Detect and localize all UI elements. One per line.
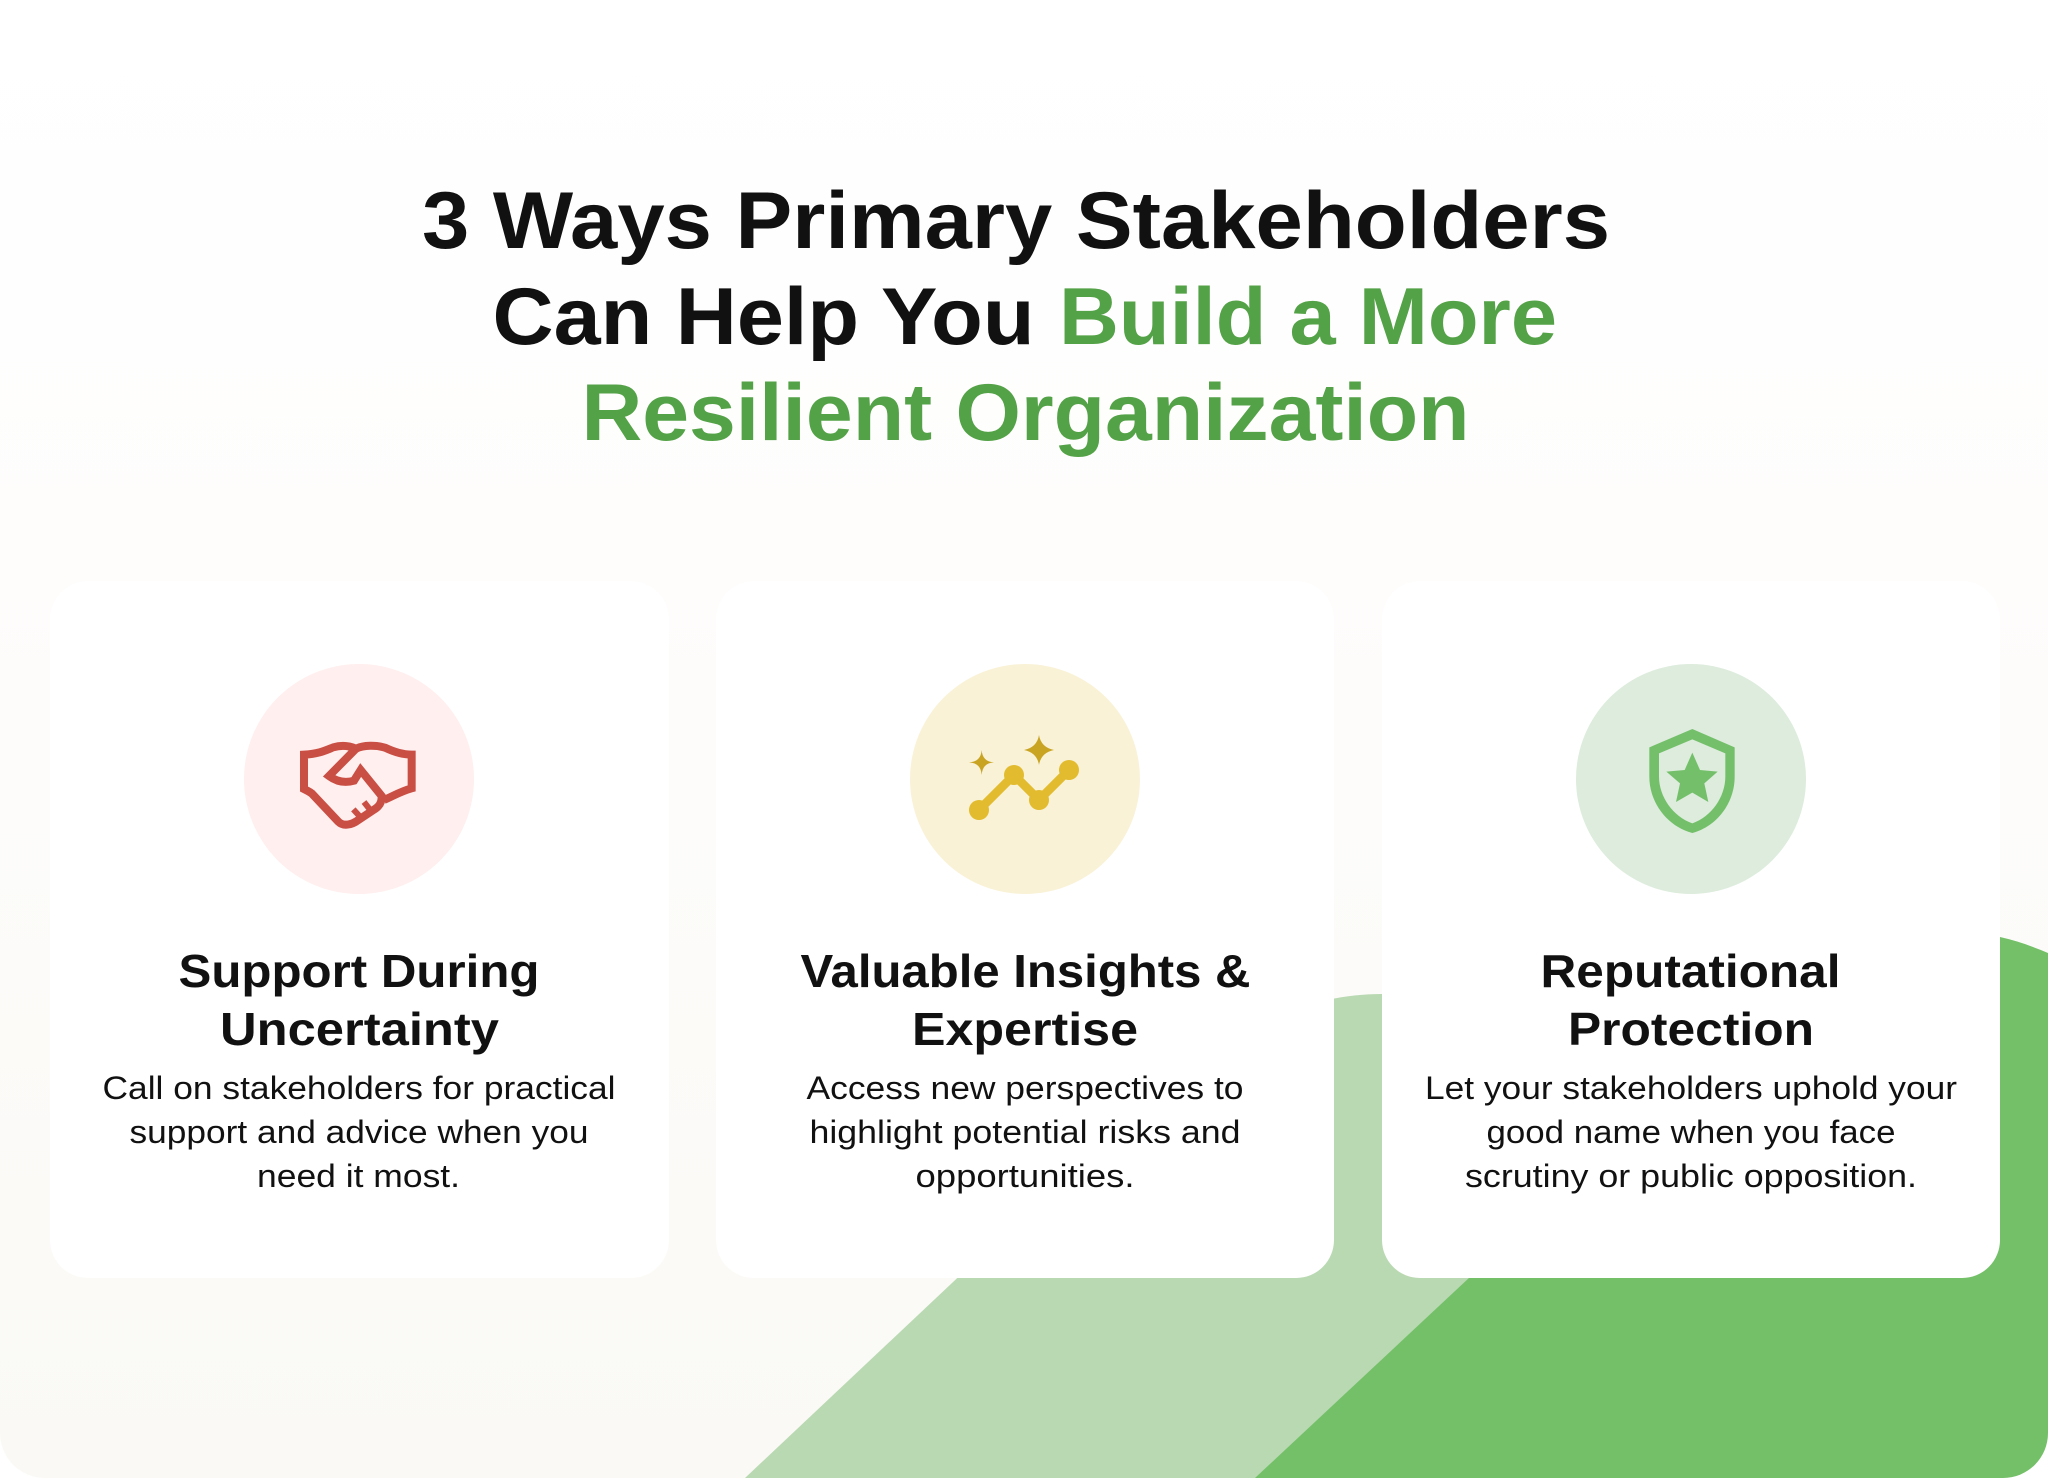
body text <box>102 1070 616 1194</box>
body text <box>806 1070 1244 1194</box>
body text: highlight potential risks and <box>810 1114 1240 1150</box>
heading <box>1540 945 1840 1055</box>
panel: support during uncertainty <box>50 581 669 1278</box>
icon: handshake <box>244 664 474 894</box>
title <box>422 176 1610 458</box>
heading: Protection <box>1568 1003 1814 1055</box>
heading: Expertise <box>912 1003 1138 1055</box>
heading <box>178 945 540 1055</box>
heading <box>800 945 1250 1055</box>
background panel <box>0 937 2048 1478</box>
panel: valuable insights and expertise <box>716 581 1334 1278</box>
body text: good name when you face <box>1486 1114 1896 1150</box>
title: Can Help You <box>492 272 1034 362</box>
heading: Uncertainty <box>220 1003 499 1055</box>
icon: chart with sparkles <box>910 664 1140 894</box>
body text <box>1425 1070 1957 1194</box>
body text: Access new perspectives to <box>806 1070 1244 1106</box>
body text: need it most. <box>257 1158 460 1194</box>
title: 3 Ways Primary Stakeholders <box>422 176 1610 266</box>
body text: Let your stakeholders uphold your <box>1425 1070 1957 1106</box>
panel: reputational protection <box>1382 581 2000 1278</box>
heading: Reputational <box>1540 945 1840 997</box>
title: Build a More <box>1059 272 1557 362</box>
heading: Support During <box>178 945 540 997</box>
icon: shield with star <box>1576 664 1806 894</box>
body text: scrutiny or public opposition. <box>1465 1158 1917 1194</box>
body text: support and advice when you <box>130 1114 588 1150</box>
body text: opportunities. <box>916 1158 1134 1194</box>
body text: Call on stakeholders for practical <box>102 1070 616 1106</box>
heading: Valuable Insights & <box>800 945 1250 997</box>
title: Resilient Organization <box>582 368 1470 458</box>
